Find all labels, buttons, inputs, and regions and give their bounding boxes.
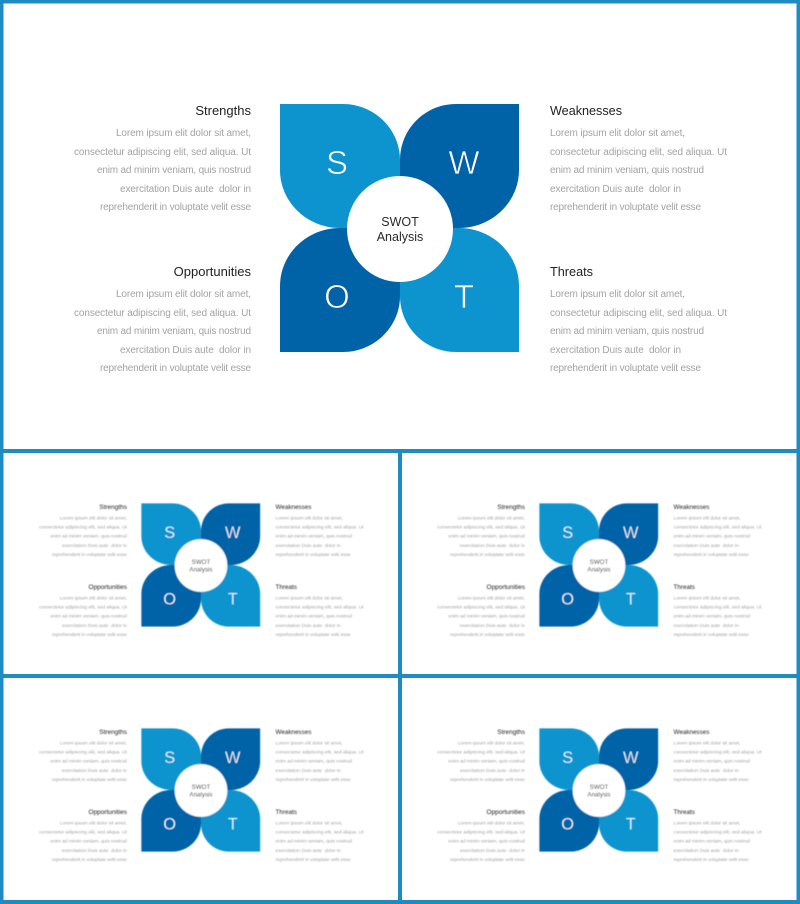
text: left column: Strengths — [99, 729, 127, 736]
text: right column: Lorem ipsum elit dolor sit amet, — [674, 595, 741, 601]
text block: Opportunities: exercitation Duis aute dolor in — [120, 345, 251, 356]
text: left column: consectetur adipiscing elit, sed aliqua. Ut — [437, 605, 526, 611]
text: right column: Lorem ipsum elit dolor sit amet, — [276, 595, 343, 601]
text: left column: exercitation Duis aute dolor in — [460, 768, 525, 774]
text: left column: reprehenderit in voluptate velit esse — [52, 777, 127, 783]
text block: Opportunities: enim ad minim veniam, quis nostrud — [97, 326, 251, 337]
text: left column: consectetur adipiscing elit, sed aliqua. Ut — [39, 830, 128, 836]
text: right column: reprehenderit in voluptate velit esse — [276, 552, 351, 558]
text: left column: exercitation Duis aute dolor in — [62, 623, 127, 629]
diagram: SWOT flower: O — [561, 816, 574, 834]
text: right column: Lorem ipsum elit dolor sit amet, — [276, 820, 343, 826]
text: left column: exercitation Duis aute dolor in — [460, 543, 525, 549]
text block: Threats — [550, 289, 727, 374]
diagram: SWOT flower: SWOT — [590, 559, 609, 566]
text: right column: reprehenderit in voluptate velit esse — [674, 632, 749, 638]
text block: Strengths — [74, 128, 251, 213]
text: left column: consectetur adipiscing elit, sed aliqua. Ut — [437, 525, 526, 531]
text: right column: Threats — [674, 809, 695, 816]
text: left column: enim ad minim veniam, quis nostrud — [50, 614, 127, 620]
text block: Weaknesses: Lorem ipsum elit dolor sit amet, — [550, 128, 685, 139]
text: left column: Lorem ipsum elit dolor sit amet, — [458, 820, 525, 826]
text: left column: enim ad minim veniam, quis nostrud — [448, 534, 525, 540]
diagram: SWOT flower: O — [561, 591, 574, 609]
text: right column: consectetur adipiscing elit, sed aliqua. Ut — [674, 525, 762, 531]
text block: Strengths: Lorem ipsum elit dolor sit amet, — [116, 128, 251, 139]
text: left column: exercitation Duis aute dolor in — [62, 543, 127, 549]
text: left column — [39, 504, 128, 638]
diagram: SWOT flower — [539, 728, 658, 852]
text: left column: Lorem ipsum elit dolor sit amet, — [458, 740, 525, 746]
text: left column: reprehenderit in voluptate velit esse — [52, 857, 127, 863]
text: left column: reprehenderit in voluptate velit esse — [52, 632, 127, 638]
text: right column: reprehenderit in voluptate velit esse — [674, 777, 749, 783]
text: right column: exercitation Duis aute dolor in — [276, 543, 341, 549]
text: left column: consectetur adipiscing elit, sed aliqua. Ut — [437, 830, 526, 836]
diagram: SWOT flower: T — [626, 816, 636, 834]
text: left column: reprehenderit in voluptate velit esse — [450, 857, 525, 863]
petal: O — [280, 228, 400, 352]
text: left column: consectetur adipiscing elit, sed aliqua. Ut — [39, 750, 128, 756]
heading: Opportunities: Opportunities — [174, 264, 251, 279]
diagram: SWOT flower: Analysis — [587, 791, 611, 798]
diagram: SWOT flower: SWOT — [192, 784, 211, 791]
text: right column: reprehenderit in voluptate velit esse — [276, 632, 351, 638]
text block: Strengths: exercitation Duis aute dolor in — [120, 184, 251, 195]
text block: Threats: consectetur adipiscing elit, sed aliqua. Ut — [550, 308, 727, 319]
text: right column: exercitation Duis aute dolor in — [276, 848, 341, 854]
letter: S: S — [326, 144, 348, 181]
diagram: SWOT flower: O — [163, 591, 176, 609]
diagram: SWOT flower: T — [228, 591, 238, 609]
text: left column: Strengths — [497, 504, 525, 511]
text: left column: consectetur adipiscing elit, sed aliqua. Ut — [39, 605, 128, 611]
text: right column: enim ad minim veniam, quis nostrud — [276, 839, 352, 845]
text block: Strengths: consectetur adipiscing elit, sed aliqua. Ut — [74, 147, 251, 158]
text: right column: Lorem ipsum elit dolor sit amet, — [674, 820, 741, 826]
text: right column: consectetur adipiscing elit, sed aliqua. Ut — [674, 750, 762, 756]
text: left column: exercitation Duis aute dolor in — [460, 623, 525, 629]
text: right column: exercitation Duis aute dolor in — [674, 623, 739, 629]
text block: Weaknesses — [550, 128, 727, 213]
petal: T — [400, 228, 519, 352]
text block: Weaknesses: enim ad minim veniam, quis nostrud — [550, 165, 704, 176]
letter: W: W — [448, 144, 480, 181]
text: left column: exercitation Duis aute dolor in — [62, 848, 127, 854]
text: left column: Lorem ipsum elit dolor sit amet, — [458, 515, 525, 521]
text block: Weaknesses: exercitation Duis aute dolor in — [550, 184, 681, 195]
text: right column: exercitation Duis aute dolor in — [674, 768, 739, 774]
diagram: SWOT flower — [280, 104, 519, 352]
text: right column: consectetur adipiscing elit, sed aliqua. Ut — [674, 830, 762, 836]
text: right column — [674, 729, 762, 863]
text: right column — [276, 729, 364, 863]
text: right column: enim ad minim veniam, quis nostrud — [276, 614, 352, 620]
text: left column — [39, 729, 128, 863]
text: right column: consectetur adipiscing elit, sed aliqua. Ut — [276, 830, 364, 836]
letter: O: O — [324, 278, 350, 315]
text: right column: Lorem ipsum elit dolor sit amet, — [276, 515, 343, 521]
text: left column: enim ad minim veniam, quis nostrud — [448, 614, 525, 620]
text block: Opportunities: reprehenderit in voluptate velit esse — [100, 363, 251, 374]
panel: thumbnail bottom right — [437, 728, 762, 863]
text: left column: enim ad minim veniam, quis nostrud — [50, 839, 127, 845]
panel: main SWOT slide — [74, 103, 727, 374]
diagram: SWOT flower: Analysis — [587, 566, 611, 573]
heading: Threats: Threats — [550, 264, 593, 279]
text: right column: Lorem ipsum elit dolor sit amet, — [276, 740, 343, 746]
diagram: SWOT flower: W — [623, 749, 639, 767]
text: right column: enim ad minim veniam, quis nostrud — [674, 534, 750, 540]
text: right column: exercitation Duis aute dolor in — [276, 623, 341, 629]
petal: W — [400, 104, 519, 228]
text: left column: Opportunities — [487, 584, 525, 591]
text: left column: Lorem ipsum elit dolor sit amet, — [458, 595, 525, 601]
text: left column — [437, 504, 526, 638]
text: right column: enim ad minim veniam, quis nostrud — [276, 759, 352, 765]
text: right column — [276, 504, 364, 638]
text: right column: enim ad minim veniam, quis nostrud — [674, 839, 750, 845]
diagram: SWOT flower: W — [623, 524, 639, 542]
text: right column: enim ad minim veniam, quis nostrud — [674, 759, 750, 765]
text: right column: Weaknesses — [276, 729, 311, 736]
text: right column: reprehenderit in voluptate velit esse — [674, 552, 749, 558]
text: left column: consectetur adipiscing elit, sed aliqua. Ut — [437, 750, 526, 756]
diagram: SWOT flower: SWOT — [590, 784, 609, 791]
text: right column: Threats — [276, 584, 297, 591]
text: right column: consectetur adipiscing elit, sed aliqua. Ut — [276, 605, 364, 611]
text: left column: consectetur adipiscing elit, sed aliqua. Ut — [39, 525, 128, 531]
text: right column: Lorem ipsum elit dolor sit amet, — [674, 515, 741, 521]
panel: thumbnail top left — [39, 503, 364, 638]
text: left column — [437, 729, 526, 863]
text: left column: Lorem ipsum elit dolor sit amet, — [60, 595, 127, 601]
text: left column: reprehenderit in voluptate velit esse — [450, 777, 525, 783]
text block: Weaknesses: reprehenderit in voluptate velit esse — [550, 202, 701, 213]
text block: Opportunities — [74, 289, 251, 374]
panel: thumbnail bottom left — [39, 728, 364, 863]
text block: Weaknesses: consectetur adipiscing elit, sed aliqua. Ut — [550, 147, 727, 158]
diagram: SWOT flower — [141, 728, 260, 852]
text block: Threats: enim ad minim veniam, quis nostrud — [550, 326, 704, 337]
text: right column: exercitation Duis aute dolor in — [674, 848, 739, 854]
text: right column: consectetur adipiscing elit, sed aliqua. Ut — [276, 525, 364, 531]
text block: Threats: exercitation Duis aute dolor in — [550, 345, 681, 356]
text: left column: Lorem ipsum elit dolor sit amet, — [60, 740, 127, 746]
text: left column: Strengths — [497, 729, 525, 736]
text: left column: reprehenderit in voluptate velit esse — [450, 632, 525, 638]
text: right column: Weaknesses — [674, 504, 709, 511]
heading: Weaknesses: Weaknesses — [550, 103, 622, 118]
panel: thumbnail top right — [437, 503, 762, 638]
heading: Strengths: Strengths — [195, 103, 251, 118]
diagram: SWOT flower: W — [225, 749, 241, 767]
text: right column: Lorem ipsum elit dolor sit amet, — [674, 740, 741, 746]
text block: Strengths: reprehenderit in voluptate velit esse — [100, 202, 251, 213]
diagram: SWOT flower: T — [228, 816, 238, 834]
text: right column: Threats — [276, 809, 297, 816]
diagram: SWOT flower: S — [562, 524, 573, 542]
text block: Opportunities: Lorem ipsum elit dolor sit amet, — [116, 289, 251, 300]
text: right column: exercitation Duis aute dolor in — [276, 768, 341, 774]
letter: T: T — [454, 278, 474, 315]
diagram: SWOT flower: T — [626, 591, 636, 609]
petal: S — [280, 104, 400, 228]
text: right column: consectetur adipiscing elit, sed aliqua. Ut — [674, 605, 762, 611]
text block: Threats: Lorem ipsum elit dolor sit amet, — [550, 289, 685, 300]
text: right column: Weaknesses — [674, 729, 709, 736]
text: left column: Lorem ipsum elit dolor sit amet, — [60, 820, 127, 826]
diagram: SWOT flower: Analysis — [189, 791, 213, 798]
center label: SWOT — [381, 215, 419, 229]
text: right column: consectetur adipiscing elit, sed aliqua. Ut — [276, 750, 364, 756]
text: left column: enim ad minim veniam, quis nostrud — [448, 759, 525, 765]
text: right column — [674, 504, 762, 638]
text: left column: enim ad minim veniam, quis nostrud — [448, 839, 525, 845]
text block: Opportunities: consectetur adipiscing elit, sed aliqua. Ut — [74, 308, 251, 319]
text: right column: Weaknesses — [276, 504, 311, 511]
text: left column: reprehenderit in voluptate velit esse — [52, 552, 127, 558]
text: right column: enim ad minim veniam, quis nostrud — [276, 534, 352, 540]
diagram: SWOT flower: W — [225, 524, 241, 542]
text: right column: enim ad minim veniam, quis nostrud — [674, 614, 750, 620]
diagram: SWOT flower — [539, 503, 658, 627]
text: left column: Opportunities — [487, 809, 525, 816]
diagram: SWOT flower: S — [562, 749, 573, 767]
text: right column: reprehenderit in voluptate velit esse — [276, 777, 351, 783]
center circle — [347, 176, 453, 282]
text block: Threats: reprehenderit in voluptate velit esse — [550, 363, 701, 374]
text: left column: enim ad minim veniam, quis nostrud — [50, 534, 127, 540]
text: right column: reprehenderit in voluptate velit esse — [276, 857, 351, 863]
text: right column: exercitation Duis aute dolor in — [674, 543, 739, 549]
text: right column: reprehenderit in voluptate velit esse — [674, 857, 749, 863]
text: left column: Lorem ipsum elit dolor sit amet, — [60, 515, 127, 521]
text: left column: exercitation Duis aute dolor in — [460, 848, 525, 854]
text: left column: Strengths — [99, 504, 127, 511]
diagram: SWOT flower: S — [164, 749, 175, 767]
diagram: SWOT flower: S — [164, 524, 175, 542]
text block: Strengths: enim ad minim veniam, quis nostrud — [97, 165, 251, 176]
text: left column: Opportunities — [89, 809, 127, 816]
text: left column: enim ad minim veniam, quis nostrud — [50, 759, 127, 765]
center label: Analysis — [377, 230, 423, 244]
text: right column: Threats — [674, 584, 695, 591]
diagram: SWOT flower — [141, 503, 260, 627]
text: left column: Opportunities — [89, 584, 127, 591]
diagram: SWOT flower: SWOT — [192, 559, 211, 566]
diagram: SWOT flower: O — [163, 816, 176, 834]
diagram: SWOT flower: Analysis — [189, 566, 213, 573]
text: left column: reprehenderit in voluptate velit esse — [450, 552, 525, 558]
text: left column: exercitation Duis aute dolor in — [62, 768, 127, 774]
